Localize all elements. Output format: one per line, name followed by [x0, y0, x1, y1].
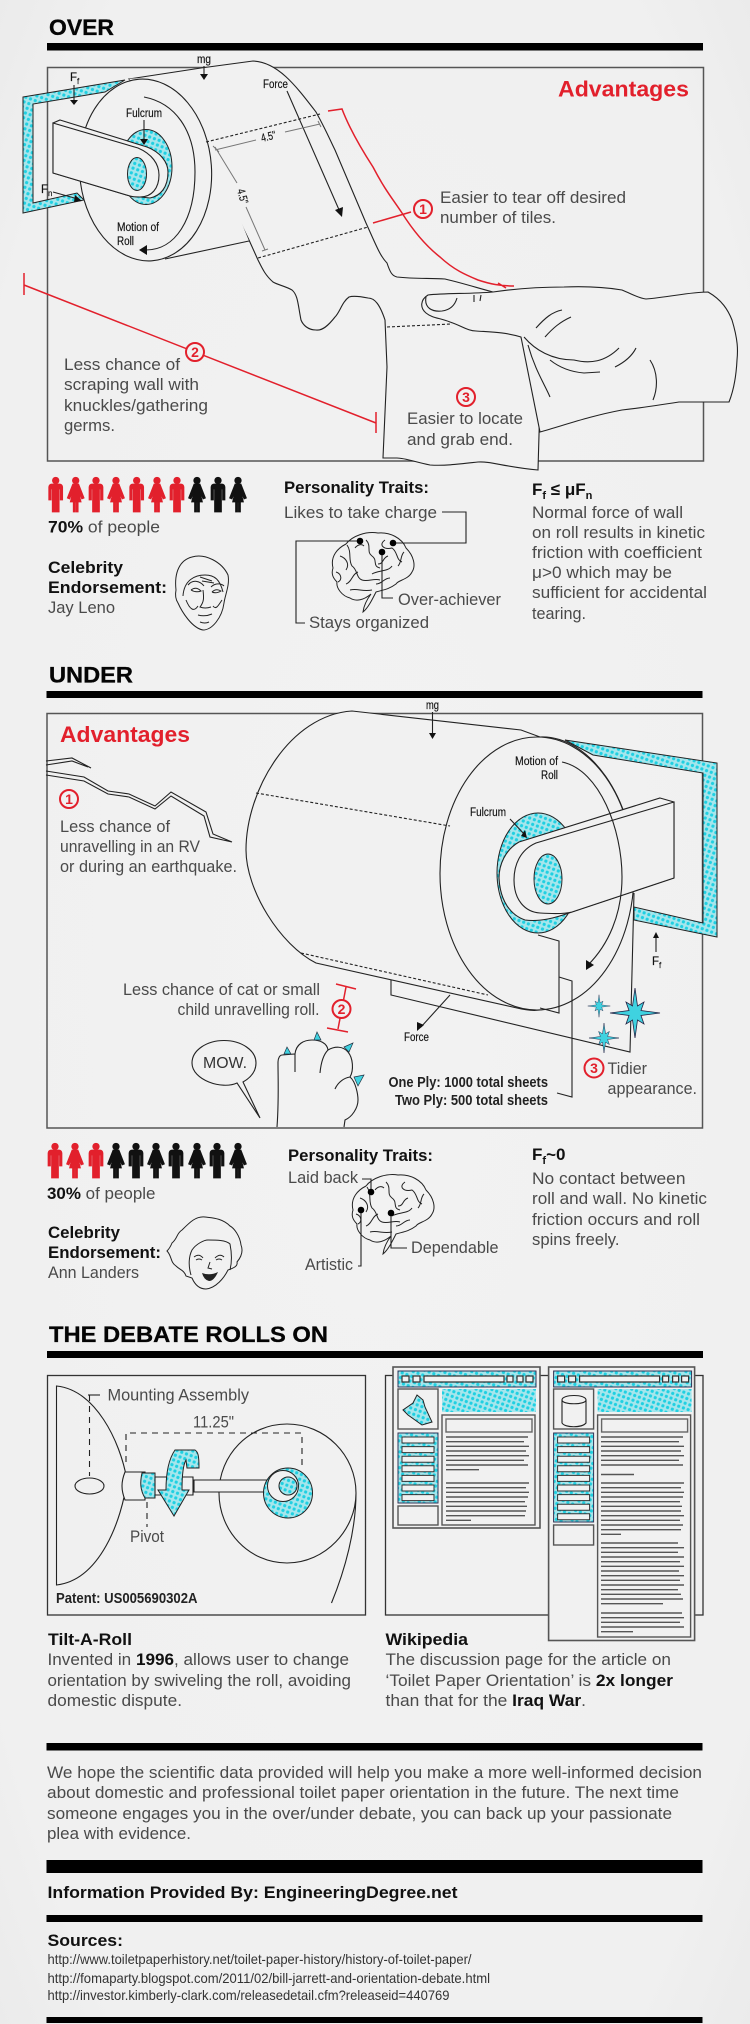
text: friction formula under [532, 1145, 707, 1249]
text: friction formula under: friction occurs and roll [532, 1210, 700, 1229]
illustration: pivot mount [122, 1472, 145, 1500]
labels: diagram small text: Force [404, 1032, 429, 1044]
celebrity: Ann Landers: Endorsement: [48, 1243, 161, 1262]
celebrity: Ann Landers: Ann Landers [48, 1263, 139, 1282]
callout 2: scraping: scraping wall with [64, 375, 199, 394]
text: tilt-a-roll: domestic dispute. [48, 1691, 182, 1710]
callout 1: tearing: Easier to tear off desired [440, 188, 626, 207]
icon: brain [332, 533, 414, 612]
labels: diagram small text: 4.5" [260, 130, 277, 145]
text: friction formula over: tearing. [532, 604, 586, 623]
panel: tilt-a-roll diagram: Patent: US005690302A [56, 1591, 198, 1607]
text: sources: Sources: [48, 1931, 123, 1950]
text: tilt-a-roll: Invented in 1996, allows user to change [48, 1650, 349, 1669]
labels: diagram small text: mg [426, 700, 439, 712]
heading: advantages: Advantages [60, 722, 190, 747]
callout 3: tidier [584, 1058, 697, 1098]
panel: tilt-a-roll diagram: 11.25" [193, 1412, 234, 1432]
labels: diagram small text: F [41, 184, 48, 196]
text: friction formula under: No contact between [532, 1169, 686, 1188]
labels: diagram small text [388, 700, 662, 1109]
pictogram: 70 percent [49, 477, 247, 512]
icon: wall bracket [565, 740, 717, 937]
callout 1: earthquake crack: unravelling in an RV [60, 837, 201, 856]
stat: 30 percent of people: 30% of people [47, 1184, 156, 1203]
text: friction formula under: spins freely. [532, 1230, 620, 1249]
labels: diagram small text: f [659, 961, 662, 970]
text: tilt-a-roll [48, 1630, 351, 1710]
text: wikipedia: than that for the Iraq War. [386, 1691, 586, 1710]
section: THE DEBATE ROLLS ON [47, 1322, 703, 1710]
callout 2: cat or child [123, 980, 356, 1032]
callout 2: cat or child: Less chance of cat or small [123, 980, 320, 999]
text: sources: http://fomaparty.blogspot.com/2011/02/bill-jarrett-and-orientation-debate.html [48, 1970, 490, 1986]
celebrity: Jay Leno: Celebrity [48, 558, 124, 577]
callout 3: locate end: 3 [462, 389, 470, 405]
labels: diagram small text: Two Ply: 500 total sheets [395, 1093, 548, 1109]
callout 3: locate end: Easier to locate [407, 409, 523, 428]
icon: mini toilet roll [562, 1396, 586, 1427]
traits: under personality: Dependable [411, 1238, 498, 1257]
text: friction formula over: Normal force of wall [532, 503, 683, 522]
labels: diagram small text: F [652, 956, 659, 968]
labels: diagram small text: Roll [541, 770, 558, 782]
text: tilt-a-roll: orientation by swiveling the roll, avoiding [48, 1671, 351, 1690]
callout 3: locate end [407, 388, 523, 449]
arrow: motion of roll [139, 97, 195, 255]
labels: diagram small text: mg [197, 54, 211, 66]
traits: under personality [288, 1146, 498, 1274]
heading: advantages: Advantages [558, 76, 689, 102]
callout 2: scraping: knuckles/gathering [64, 396, 208, 415]
celebrity: Jay Leno [48, 558, 167, 617]
text: friction formula over: friction with coefficient [532, 543, 702, 562]
panel: wikipedia comparison [386, 1367, 703, 1640]
icon: brain [352, 1175, 434, 1254]
text: friction formula over: on roll results in kinetic [532, 523, 705, 542]
panel: tilt-a-roll diagram: Pivot [130, 1527, 164, 1546]
traits: under personality: Laid back [288, 1168, 358, 1187]
illustration: hanging paper sheet [391, 893, 634, 1097]
callout 1: earthquake crack: or during an earthquake. [60, 857, 237, 876]
labels: diagram small text: Fulcrum [126, 108, 162, 120]
callout 1: earthquake crack: Less chance of [60, 817, 170, 836]
labels: diagram small text: Motion of [515, 756, 559, 768]
window: Iraq War page [393, 1367, 540, 1528]
text: sources: http://www.toiletpaperhistory.net/toilet-paper-history/history-of-toilet-paper/ [48, 1951, 472, 1967]
illustration: roll [219, 1424, 356, 1603]
text: conclusion: someone engages you in the over/under debate, you can back up your passionate [47, 1804, 672, 1823]
labels: diagram small text: 4.5" [234, 188, 250, 205]
traits: under personality: Artistic [305, 1255, 353, 1274]
heading: debate: THE DEBATE ROLLS ON [49, 1322, 328, 1347]
labels: diagram small text: One Ply: 1000 total sheets [388, 1075, 548, 1091]
text: friction formula over [532, 480, 707, 623]
icon: Ann Landers face [167, 1217, 242, 1289]
arrows: forces and motion [417, 712, 659, 1031]
icon: cat paw [277, 1032, 364, 1127]
labels: diagram small text: Roll [117, 236, 134, 248]
traits: under personality: Personality Traits: [288, 1146, 433, 1165]
text: friction formula over: f [542, 490, 546, 502]
traits: over personality: Stays organized [309, 613, 429, 632]
callout 3: tidier: 3 [590, 1060, 598, 1076]
labels: diagram small text: f [77, 77, 80, 86]
illustration: unrolled paper sheet [129, 61, 540, 470]
illustration: roll end [73, 75, 218, 265]
text: friction formula under: f [542, 1155, 546, 1167]
callout 1: tearing: number of tiles. [440, 208, 556, 227]
labels: diagram small text: Motion of [117, 222, 160, 234]
illustration: hand [422, 287, 737, 432]
labels: diagram small text: Fulcrum [470, 807, 506, 819]
traits: over personality: Over-achiever [398, 590, 501, 609]
text: friction formula under: ~0 [546, 1145, 565, 1164]
text: wikipedia [386, 1630, 673, 1710]
labels: diagram small text: F [70, 72, 77, 84]
celebrity: Ann Landers [48, 1223, 161, 1282]
callout 2: scraping: germs. [64, 416, 115, 435]
arrow: swivel direction [158, 1450, 199, 1516]
text: conclusion: plea with evidence. [47, 1824, 191, 1843]
text: wikipedia: Wikipedia [386, 1630, 469, 1649]
callout 1: earthquake crack: 1 [65, 791, 73, 807]
callout 2: scraping: 2 [191, 344, 199, 360]
callout 3: tidier: Tidier [608, 1059, 647, 1078]
callout 2: scraping: Less chance of [64, 355, 180, 374]
callout 1: earthquake crack [46, 758, 237, 876]
heading: OVER: OVER [49, 15, 114, 40]
traits: over personality [284, 478, 501, 632]
icon: Jay Leno face [176, 556, 228, 630]
labels: diagram small text: n [48, 189, 52, 198]
text: sources: http://investor.kimberly-clark.com/releasedetail.cfm?releaseid=440769 [48, 1987, 450, 2003]
illustration: roll body side [129, 78, 249, 259]
callout 1: tearing: 1 [419, 201, 427, 217]
celebrity: Jay Leno: Jay Leno [48, 598, 115, 617]
panel: tilt-a-roll diagram: Mounting Assembly [108, 1386, 249, 1404]
callout 2: scraping [24, 273, 376, 435]
text: conclusion: We hope the scientific data provided will help you make a more well-informed decision [47, 1763, 702, 1782]
text: friction formula under: roll and wall. No kinetic [532, 1189, 707, 1208]
heading: UNDER: UNDER [49, 662, 133, 688]
stat: 70 percent of people: 70% of people [48, 518, 160, 536]
text: friction formula over: μ>0 which may be [532, 563, 672, 582]
illustration: holder arm [499, 798, 674, 921]
tile dashed lines and dimensions [206, 114, 452, 327]
callout 3: tidier: appearance. [608, 1079, 697, 1098]
icon: speech bubble MOW [192, 1040, 260, 1118]
panel: tilt-a-roll diagram [48, 1376, 366, 1615]
text: information credit: Information Provided By: EngineeringDegree.net [48, 1883, 458, 1902]
panel: over diagram [23, 54, 737, 470]
icon: core ring [120, 130, 172, 204]
icon: core ring [264, 1468, 312, 1518]
icon: sparkles [588, 988, 660, 1053]
text: friction formula over: n [586, 490, 593, 502]
traits: over personality: Personality Traits: [284, 478, 429, 497]
callout 2: cat or child: child unravelling roll. [178, 1000, 320, 1019]
section: OVER [23, 15, 737, 632]
panel: under diagram [46, 700, 717, 1128]
callout 1: tearing [328, 109, 626, 288]
celebrity: Jay Leno: Endorsement: [48, 578, 167, 597]
illustration: holder arm [53, 120, 168, 198]
text: conclusion: about domestic and professional toilet paper orientation in the future. The next time [47, 1783, 679, 1802]
callout 3: locate end: and grab end. [407, 430, 513, 449]
arrows: forces [53, 66, 343, 217]
labels: diagram small text: Force [263, 79, 288, 91]
section: UNDER [46, 662, 717, 1289]
illustration: roll end [440, 737, 634, 1010]
text: friction formula under: F [532, 1145, 542, 1164]
traits: over personality: Likes to take charge [284, 503, 437, 522]
icon: wall bracket [23, 80, 125, 213]
text: tilt-a-roll: Tilt-A-Roll [48, 1630, 132, 1649]
celebrity: Ann Landers: Celebrity [48, 1223, 121, 1242]
illustration: roll body [246, 711, 634, 1010]
text: friction formula over: sufficient for accidental [532, 583, 707, 602]
text: sources [48, 1931, 490, 2003]
callout 2: cat or child: 2 [338, 1001, 346, 1017]
pictogram: 30 percent [48, 1143, 246, 1178]
window: Toilet Paper Orientation page [549, 1367, 695, 1640]
text: friction formula over: ≤ μF [546, 480, 586, 499]
text: conclusion [47, 1763, 702, 1843]
icon: speech bubble MOW: MOW. [203, 1055, 247, 1072]
text: friction formula over: F [532, 480, 542, 499]
icon: core ring [497, 813, 579, 933]
text: wikipedia: The discussion page for the article on [386, 1650, 671, 1669]
labels: diagram small text [41, 54, 288, 248]
text: wikipedia: ‘Toilet Paper Orientation’ is 2x longer [386, 1671, 673, 1690]
